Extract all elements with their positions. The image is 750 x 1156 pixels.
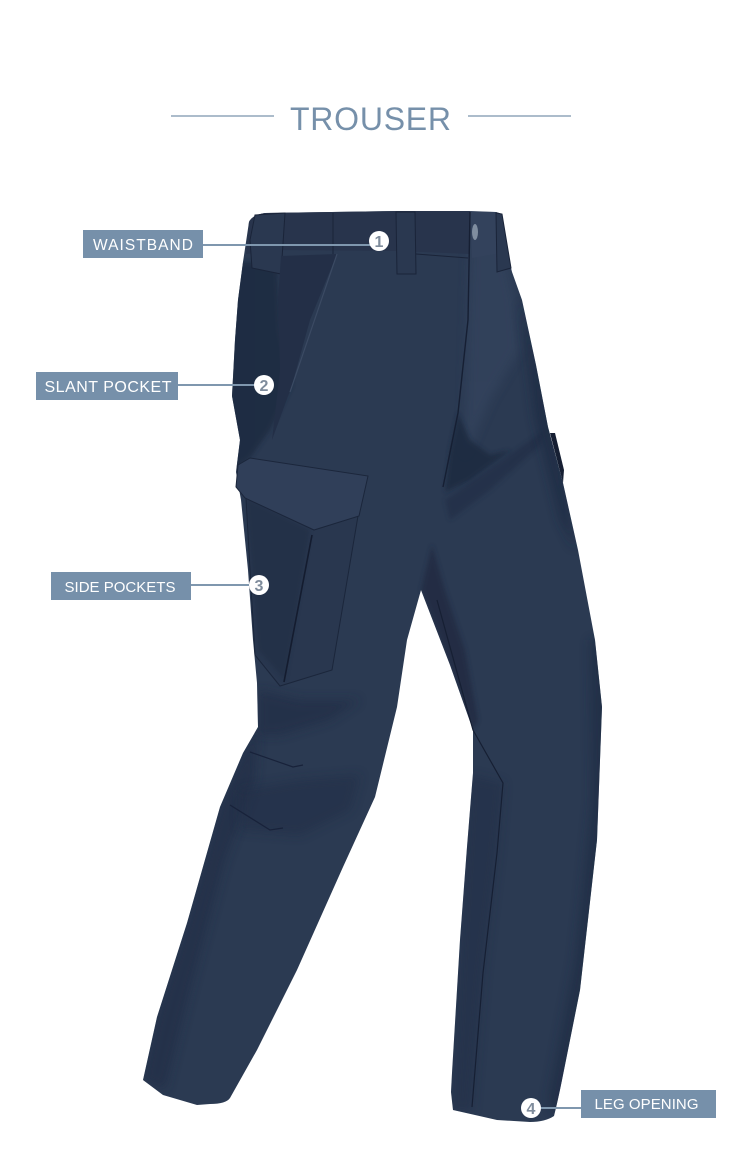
button — [472, 224, 478, 240]
callout 3: side pockets — [51, 572, 269, 600]
callout 2: slant pocket: SLANT POCKET — [44, 379, 172, 396]
waistband seam — [333, 213, 468, 258]
knee creases — [230, 752, 303, 830]
shading and folds — [143, 225, 610, 1120]
callout 4: leg opening: 4 — [527, 1101, 536, 1118]
callout 3: side pockets: SIDE POCKETS — [64, 579, 176, 596]
waistband — [246, 211, 470, 254]
belt loops — [250, 212, 511, 274]
trouser illustration — [143, 211, 610, 1122]
callout 4: leg opening — [521, 1090, 716, 1118]
cargo pocket — [246, 498, 358, 686]
callout 1: waistband — [83, 230, 389, 258]
fly seam — [443, 212, 470, 487]
callout 4: leg opening: LEG OPENING — [594, 1096, 698, 1113]
trouser silhouette — [143, 211, 602, 1122]
callout 1: waistband: 1 — [375, 234, 384, 251]
callout 3: side pockets: 3 — [255, 578, 264, 595]
inseam — [437, 600, 503, 1107]
slant pocket — [272, 254, 337, 440]
callout 2: slant pocket — [36, 372, 274, 400]
title: TROUSER — [290, 101, 451, 137]
callout 2: slant pocket: 2 — [260, 378, 269, 395]
callout 1: waistband: WAISTBAND — [93, 237, 193, 254]
cargo pocket flap — [236, 458, 368, 530]
right side pocket edge — [550, 433, 564, 483]
